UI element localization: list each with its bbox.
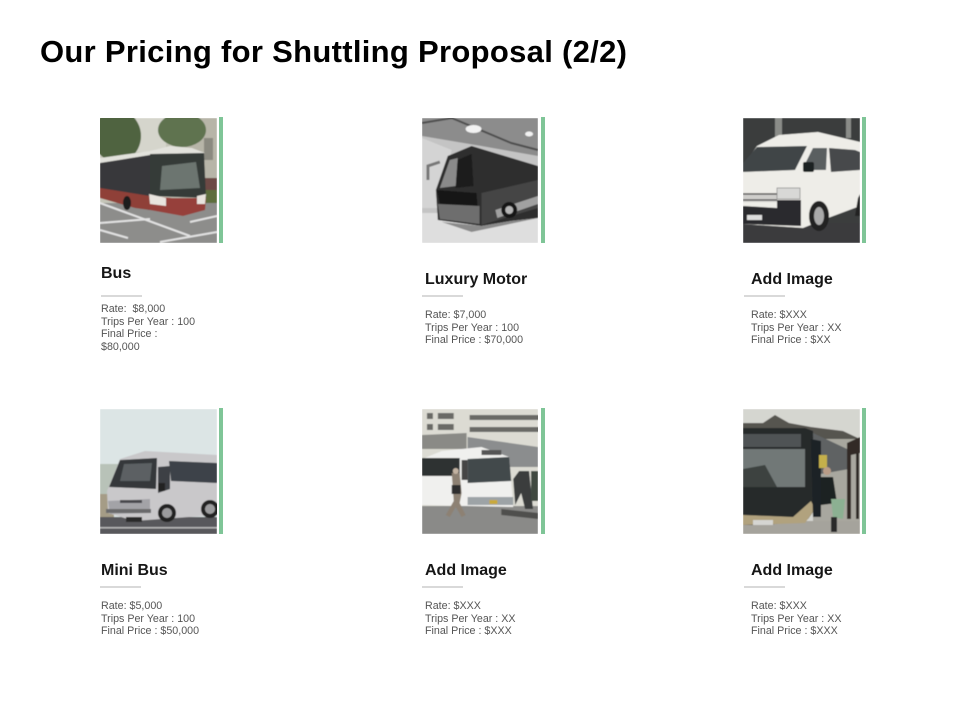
details: $80,000 bbox=[101, 341, 140, 353]
details: Trips Per Year : 100 bbox=[101, 316, 195, 328]
details: Final Price : $XXX bbox=[751, 625, 838, 637]
details: Trips Per Year : 100 bbox=[425, 322, 519, 334]
details: Rate: $5,000 bbox=[101, 600, 162, 612]
details: Trips Per Year : XX bbox=[751, 613, 842, 625]
panel: add image bottom right bbox=[743, 408, 866, 637]
details: Final Price : $50,000 bbox=[101, 625, 199, 637]
accent bar bbox=[541, 408, 545, 534]
title: Our Pricing for Shuttling Proposal (2/2) bbox=[40, 34, 627, 69]
details: Final Price : bbox=[101, 328, 157, 340]
heading: Add Image bbox=[425, 562, 507, 579]
heading: Luxury Motor bbox=[425, 271, 527, 288]
heading: Bus bbox=[101, 265, 131, 282]
details: Rate: $7,000 bbox=[425, 309, 486, 321]
details bbox=[101, 303, 195, 353]
photo: red and white city bus bbox=[100, 118, 217, 243]
details bbox=[425, 600, 516, 637]
heading: Add Image bbox=[751, 271, 833, 288]
photo: gold bus with passenger boarding bbox=[743, 409, 860, 534]
details: Final Price : $XX bbox=[751, 334, 831, 346]
details: Rate: $8,000 bbox=[101, 303, 165, 315]
heading: Add Image bbox=[751, 562, 833, 579]
details bbox=[101, 600, 199, 637]
details: Trips Per Year : XX bbox=[425, 613, 516, 625]
photo: dark luxury coach bbox=[422, 118, 538, 243]
heading: Mini Bus bbox=[101, 562, 168, 579]
panel: luxury motor bbox=[422, 117, 545, 346]
accent bar bbox=[862, 408, 866, 534]
accent bar bbox=[219, 408, 223, 534]
details: Rate: $XXX bbox=[751, 309, 807, 321]
accent bar bbox=[219, 117, 223, 243]
accent bar bbox=[541, 117, 545, 243]
photo: white van bbox=[743, 118, 860, 243]
details: Rate: $XXX bbox=[425, 600, 481, 612]
accent bar bbox=[862, 117, 866, 243]
details bbox=[425, 309, 523, 346]
panel: mini bus bbox=[100, 408, 223, 637]
photo: white bus with pedestrian bbox=[422, 409, 538, 534]
details: Trips Per Year : XX bbox=[751, 322, 842, 334]
details: Trips Per Year : 100 bbox=[101, 613, 195, 625]
details: Final Price : $XXX bbox=[425, 625, 512, 637]
photo: silver mini bus bbox=[100, 409, 217, 534]
details bbox=[751, 309, 842, 346]
details: Final Price : $70,000 bbox=[425, 334, 523, 346]
panel: bus bbox=[100, 117, 223, 353]
details bbox=[751, 600, 842, 637]
panel: add image bottom middle bbox=[422, 408, 545, 637]
details: Rate: $XXX bbox=[751, 600, 807, 612]
panel: add image top right bbox=[743, 117, 866, 346]
